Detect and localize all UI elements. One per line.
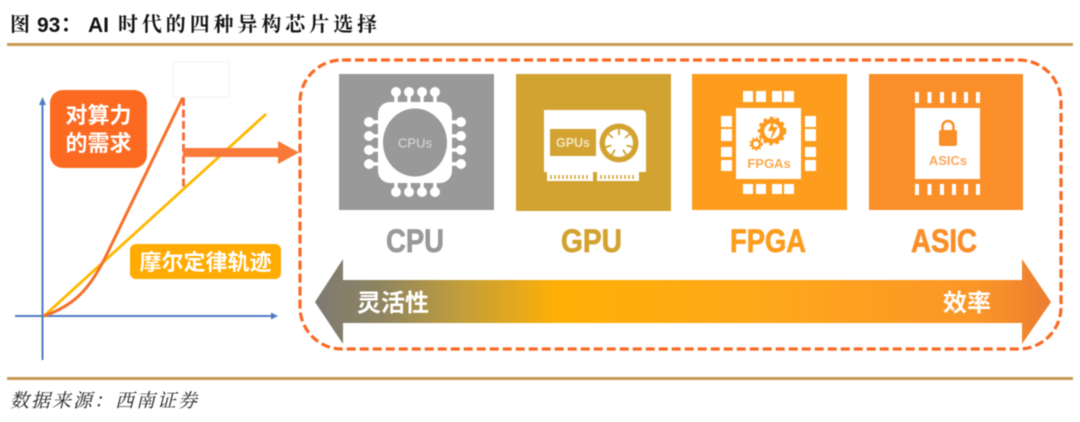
big arrow — [183, 141, 299, 164]
GPU tile — [516, 74, 671, 211]
icon: FPGA chip — [721, 91, 816, 194]
top rule — [7, 43, 1073, 46]
dashed gap line — [182, 98, 185, 189]
title: 时代的四种异构芯片选择 — [118, 8, 381, 37]
icon: CPU chip — [364, 87, 466, 197]
efficiency label: 效率 — [943, 290, 991, 317]
label: Moore's law path: 摩尔定律轨迹 — [139, 250, 272, 275]
title: 93 — [37, 14, 60, 37]
CPU tile — [339, 74, 494, 210]
FPGA tile — [692, 74, 847, 210]
double arrow: flexibility to efficiency — [315, 259, 1051, 344]
title: 图 — [10, 8, 30, 37]
ASIC label: ASIC — [911, 223, 977, 259]
Moore's law line — [44, 114, 266, 316]
CPU label: CPU — [386, 223, 444, 259]
title: AI — [88, 14, 109, 37]
label: demand for compute: 的需求 — [65, 131, 132, 156]
source note: 数据来源：西南证券 — [10, 386, 199, 413]
GPU label: GPU — [561, 223, 622, 259]
label: demand for compute — [50, 90, 147, 168]
icon: ASIC chip with lock — [915, 92, 980, 195]
title: ： — [61, 8, 81, 37]
label: demand for compute: 对算力 — [65, 103, 132, 128]
dashed panel outline — [300, 60, 1061, 349]
icon: ASIC chip with lock: ASICs — [929, 153, 967, 168]
blank white box — [173, 62, 229, 97]
ASIC tile — [869, 74, 1023, 210]
bottom rule — [7, 377, 1073, 380]
label: Moore's law path — [130, 244, 281, 279]
flexibility label: 灵活性 — [357, 290, 429, 317]
demand curve — [44, 97, 183, 316]
CPU tile: CPUs — [398, 136, 432, 150]
icon: graphics card: GPUs — [556, 136, 590, 150]
icon: FPGA chip: FPGAs — [747, 156, 791, 171]
FPGA label: FPGA — [730, 223, 806, 259]
icon: graphics card — [544, 110, 646, 181]
chart axes — [15, 97, 278, 360]
line chart: demand vs Moore's law — [15, 62, 299, 360]
